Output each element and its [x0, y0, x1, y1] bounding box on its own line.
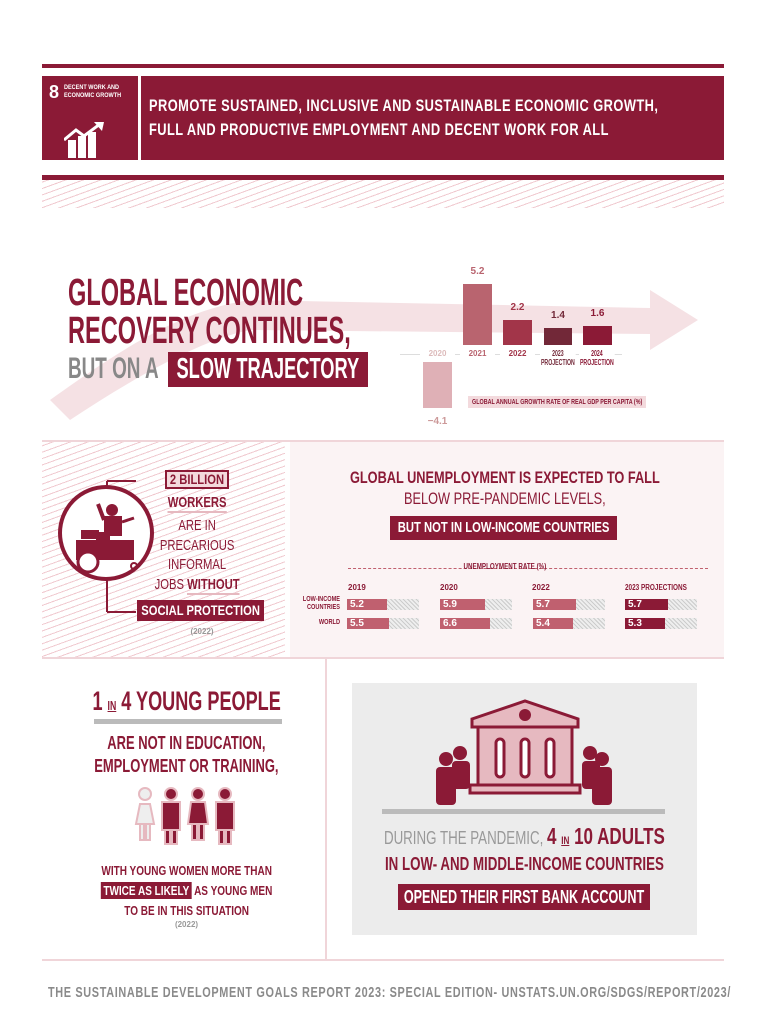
panel: informal workers: PRECARIOUS — [160, 536, 234, 554]
bar chart: GDP growth: 2022 — [509, 349, 526, 358]
panel: unemployment: UNEMPLOYMENT RATE (%) — [464, 562, 546, 571]
bar chart: GDP growth: 2021 — [469, 349, 486, 358]
panel: unemployment: 5.9 — [443, 599, 457, 610]
headline — [68, 272, 351, 352]
panel: unemployment: 5.7 — [536, 599, 550, 610]
panel: unemployment: COUNTRIES — [307, 604, 340, 611]
arrow background — [50, 290, 698, 420]
panel: unemployment: 2020 — [440, 583, 458, 592]
bar chart: GDP growth: GLOBAL ANNUAL GROWTH RATE OF REAL GDP PER CAPITA (%) — [472, 397, 642, 406]
panel: young people — [92, 686, 282, 929]
panel: unemployment: 6.6 — [443, 618, 457, 629]
banner title: FULL AND PRODUCTIVE EMPLOYMENT AND DECENT WORK FOR ALL — [149, 120, 609, 139]
bar chart: GDP growth: PROJECTION — [541, 358, 575, 367]
banner title: PROMOTE SUSTAINED, INCLUSIVE AND SUSTAINABLE ECONOMIC GROWTH, — [149, 96, 658, 115]
SDG 8 icon: ECONOMIC GROWTH — [64, 92, 121, 99]
panel: unemployment: 5.4 — [536, 618, 550, 629]
bar chart: GDP growth: −4.1 — [428, 416, 447, 427]
panel: informal workers: SOCIAL PROTECTION — [141, 602, 260, 618]
headline: GLOBAL ECONOMIC — [68, 272, 303, 314]
icon: bank with people — [436, 699, 612, 805]
panel: informal workers: ARE IN — [178, 517, 216, 534]
bar chart: GDP growth: 1.6 — [591, 308, 604, 319]
bar chart: GDP growth: 2.2 — [511, 302, 524, 313]
panel: informal workers: (2022) — [190, 627, 214, 636]
footer source: THE SUSTAINABLE DEVELOPMENT GOALS REPORT 2023: SPECIAL EDITION- UNSTATS.UN.ORG/SDGS/REPORT/2023/ — [48, 984, 731, 1001]
panel: unemployment — [290, 442, 724, 657]
panel: bank accounts: OPENED THEIR FIRST BANK ACCOUNT — [404, 887, 644, 907]
bar chart: GDP growth: 2023 — [552, 349, 564, 358]
panel: informal workers — [42, 442, 285, 657]
icon: four young people — [134, 787, 235, 845]
panel: unemployment: 5.2 — [350, 599, 364, 610]
panel: young people: ARE NOT IN EDUCATION, — [107, 733, 265, 753]
panel: unemployment: 5.5 — [350, 618, 364, 629]
panel: unemployment: LOW-INCOME — [303, 596, 340, 603]
panel: unemployment: 2022 — [532, 583, 550, 592]
panel: unemployment: GLOBAL UNEMPLOYMENT IS EXPECTED TO FALL — [350, 468, 660, 487]
bar chart: GDP growth — [400, 266, 646, 427]
SDG 8 icon: 8 — [49, 82, 59, 102]
bar chart: GDP growth: 2020 — [429, 349, 446, 358]
panel: young people: EMPLOYMENT OR TRAINING, — [94, 756, 279, 776]
panel: unemployment: 2023 PROJECTIONS — [625, 583, 687, 592]
panel: young people: TWICE AS LIKELY AS YOUNG MEN — [103, 883, 272, 898]
panel: bank accounts: DURING THE PANDEMIC, 4 IN 10 ADULTS — [384, 823, 665, 849]
panel: young people: TO BE IN THIS SITUATION — [124, 903, 249, 918]
panel: informal workers: INFORMAL — [168, 556, 226, 573]
headline: RECOVERY CONTINUES, — [68, 310, 351, 352]
panel: unemployment: BELOW PRE-PANDEMIC LEVELS, — [404, 489, 606, 508]
text: BUT ON A — [68, 352, 159, 385]
table: 2019 — [348, 583, 366, 592]
panel: bank accounts: IN LOW- AND MIDDLE-INCOME COUNTRIES — [385, 854, 664, 874]
panel: young people: 1 IN 4 YOUNG PEOPLE — [92, 686, 281, 716]
panel: unemployment: WORLD — [319, 619, 340, 626]
panel: bank accounts — [352, 683, 697, 935]
panel: informal workers: JOBS WITHOUT — [155, 576, 240, 592]
panel: unemployment: BUT NOT IN LOW-INCOME COUNTRIES — [398, 519, 609, 536]
bar chart: GDP growth: 1.4 — [551, 310, 565, 321]
bar chart: GDP growth: 2024 — [591, 349, 603, 358]
header top rule — [42, 64, 724, 68]
icon: street vendor — [58, 480, 154, 613]
SDG 8 icon: DECENT WORK AND — [64, 84, 119, 91]
panel: unemployment: 5.3 — [628, 618, 642, 629]
panel: young people: (2022) — [175, 920, 198, 929]
panel: informal workers: 2 BILLION — [170, 471, 224, 487]
panel: young people: WITH YOUNG WOMEN MORE THAN — [101, 863, 272, 878]
bar chart: GDP growth: PROJECTION — [580, 358, 614, 367]
panel: informal workers: WORKERS — [168, 494, 227, 511]
bar chart: GDP growth: 5.2 — [471, 266, 484, 277]
SDG 8 icon — [42, 76, 138, 160]
slow trajectory label: SLOW TRAJECTORY — [176, 353, 359, 385]
panel: unemployment: 5.7 — [628, 599, 642, 610]
banner title — [141, 76, 724, 160]
